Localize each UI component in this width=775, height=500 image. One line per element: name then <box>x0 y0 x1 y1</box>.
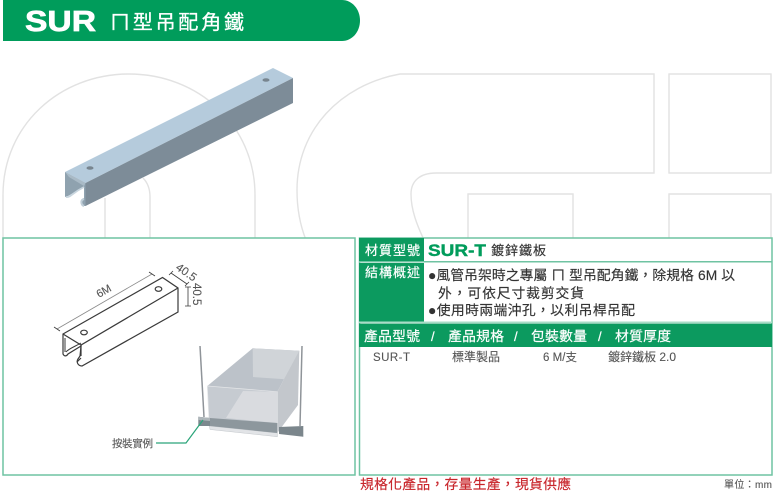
title code: SUR <box>25 6 96 38</box>
installation example: suspended duct <box>198 346 303 437</box>
title name: ㄇ型吊配角鐵 <box>110 11 244 34</box>
description text <box>428 267 735 318</box>
table header bar: / <box>598 329 602 344</box>
table header bar: / <box>431 329 435 344</box>
table header bar <box>359 322 772 347</box>
title banner <box>3 0 360 41</box>
label: installation example: 按裝實例 <box>112 437 153 450</box>
product render: channel beam <box>65 68 293 206</box>
line drawing: channel with dimensions <box>54 271 191 366</box>
dimension: width: 40.5 <box>173 262 199 284</box>
table header bar: 產品型號 <box>364 328 420 344</box>
description text: ●風管吊架時之專屬 ㄇ 型吊配角鐵，除規格 6M 以 <box>428 267 735 283</box>
table header bar: / <box>514 329 518 344</box>
table header bar: 產品規格 <box>448 328 504 344</box>
row: structure overview <box>359 263 735 322</box>
dimension: height: 40.5 <box>190 283 202 305</box>
row: material and model <box>359 238 772 262</box>
dimension: length: 6M <box>94 283 114 301</box>
leader line <box>156 420 203 443</box>
panel: drawings <box>3 238 355 475</box>
background watermark outline <box>3 74 771 240</box>
table header bar: 包裝數量 <box>531 329 587 344</box>
table header bar: 材質厚度 <box>615 329 671 344</box>
description text: 外，可依尺寸裁剪交貨 <box>438 285 584 301</box>
table data row: 6 M/支 <box>543 351 578 364</box>
model code: SUR-T <box>428 241 487 260</box>
unit note: 單位：mm <box>724 478 772 491</box>
label: structure overview: 結構概述 <box>365 265 420 280</box>
material: 鍍鋅鐵板 <box>491 243 546 258</box>
table data row: 鍍鋅鐵板 2.0 <box>608 349 676 364</box>
description text: ●使用時兩端沖孔，以利吊桿吊配 <box>428 302 635 318</box>
table data row: SUR-T <box>373 352 410 364</box>
table data row <box>373 349 676 364</box>
label: material model: 材質型號 <box>365 243 420 258</box>
table data row: 標準製品 <box>452 349 500 364</box>
panel: specifications <box>359 238 772 475</box>
footer slogan: 規格化產品，存量生產，現貨供應 <box>360 476 571 492</box>
